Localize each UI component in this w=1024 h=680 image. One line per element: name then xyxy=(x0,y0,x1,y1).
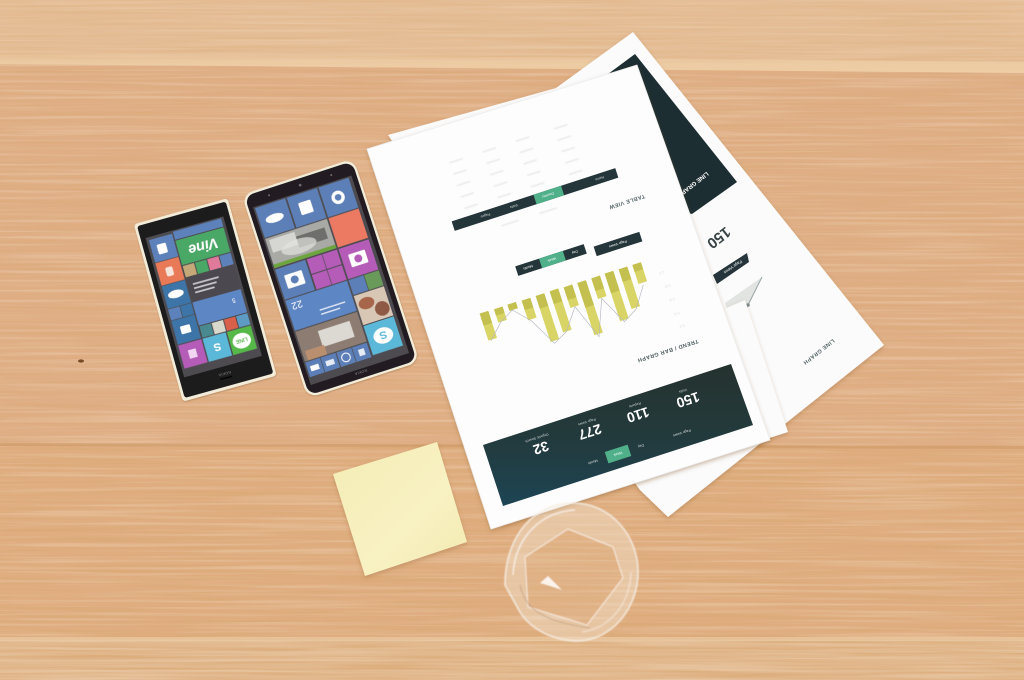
bar 7 xyxy=(564,285,579,308)
start tiles xyxy=(255,178,403,377)
start tiles xyxy=(148,218,257,369)
bar 9 xyxy=(591,276,607,299)
y-axis values: 0.6 xyxy=(668,297,676,303)
y-axis values: 0.4 xyxy=(673,311,681,317)
table view xyxy=(449,124,645,236)
middle sheet xyxy=(500,300,788,525)
people photo tiles xyxy=(354,286,393,325)
stat: 32 organic search: 32 xyxy=(531,438,551,458)
stat: 110 reports: 110 xyxy=(625,404,651,426)
bar 1 xyxy=(480,311,497,341)
trend bar graph label: TREND / BAR GRAPH xyxy=(637,337,699,363)
stat: 150 visits: Visits xyxy=(678,388,688,394)
stat: 150 visits: 150 xyxy=(674,389,702,411)
band controls xyxy=(588,428,691,465)
band controls: Day xyxy=(637,443,645,449)
period toggle: Day xyxy=(571,249,578,255)
tile labels: Vine xyxy=(186,234,220,258)
y-axis values: 1.0 xyxy=(658,270,666,277)
phone brand and buttons: NOKIA xyxy=(218,370,231,377)
sticky note xyxy=(333,442,467,576)
band controls: Month xyxy=(588,458,598,465)
stat: 277 page views: 277 xyxy=(576,421,604,443)
bar 11 xyxy=(619,267,640,309)
bar 10 xyxy=(605,271,629,321)
phone screen xyxy=(146,216,262,377)
trend line xyxy=(491,285,643,343)
period toggle: Week xyxy=(547,256,557,263)
drinking glass xyxy=(505,503,638,641)
news photo tile xyxy=(265,219,336,268)
bar 8 xyxy=(577,280,603,335)
stat: 32 organic search: Organic Search xyxy=(525,432,549,443)
band controls: Week xyxy=(613,451,623,457)
phone screen xyxy=(253,176,409,385)
table header band: Country xyxy=(542,191,555,199)
bar 12 xyxy=(632,262,647,284)
start tiles: S xyxy=(211,340,222,353)
phone body xyxy=(242,158,420,398)
y-axis values: 0.8 xyxy=(664,283,671,290)
dark header panel on back sheet: LINE GRAPH xyxy=(676,170,709,198)
page views pill: Page Views xyxy=(608,239,627,249)
front sheet: dashboard report xyxy=(367,65,770,529)
bar 2 xyxy=(494,307,507,323)
hardware key icons xyxy=(268,173,333,197)
start tiles: 5 xyxy=(230,296,236,303)
back sheet label: line graph: LINE GRAPH xyxy=(802,337,835,365)
band controls: Page Views xyxy=(672,428,691,438)
back sheet button xyxy=(713,253,749,284)
table header band xyxy=(452,168,618,231)
large phone xyxy=(242,158,420,398)
table header band: Visits xyxy=(509,203,519,209)
start tiles: S xyxy=(377,328,388,342)
bar and trend chart xyxy=(480,262,647,343)
period toggle: Month xyxy=(523,264,533,271)
start tiles: 22 xyxy=(289,297,304,311)
bar 4 xyxy=(522,298,537,320)
bar 5 xyxy=(536,293,559,342)
page views pill xyxy=(594,232,642,256)
back sheet number 150: 150 xyxy=(703,223,734,252)
stats band xyxy=(483,364,753,506)
stat: 110 reports: Reports xyxy=(628,401,641,409)
y-axis values xyxy=(658,270,686,330)
bar 3 xyxy=(507,302,518,311)
faint table rows xyxy=(449,124,591,236)
table header band: Pages xyxy=(480,212,491,219)
stat: 32 organic search xyxy=(525,432,551,458)
table header band: Name xyxy=(594,175,605,182)
phone brand: NOKIA xyxy=(354,368,368,376)
period toggle xyxy=(515,244,587,276)
dark header panel on back sheet xyxy=(600,54,737,214)
table view label: TABLE VIEW xyxy=(608,192,645,210)
phone body xyxy=(134,198,277,402)
start tiles: LINE xyxy=(234,335,248,344)
y-axis values: 0.2 xyxy=(678,323,686,330)
small phone xyxy=(134,198,277,402)
back sheet: line graph page xyxy=(388,32,884,517)
stat: 277 page views: Page Views xyxy=(577,417,596,427)
bar 6 xyxy=(550,289,572,333)
back sheet button: Page Views xyxy=(723,259,743,275)
back sheet line chart xyxy=(725,277,762,333)
